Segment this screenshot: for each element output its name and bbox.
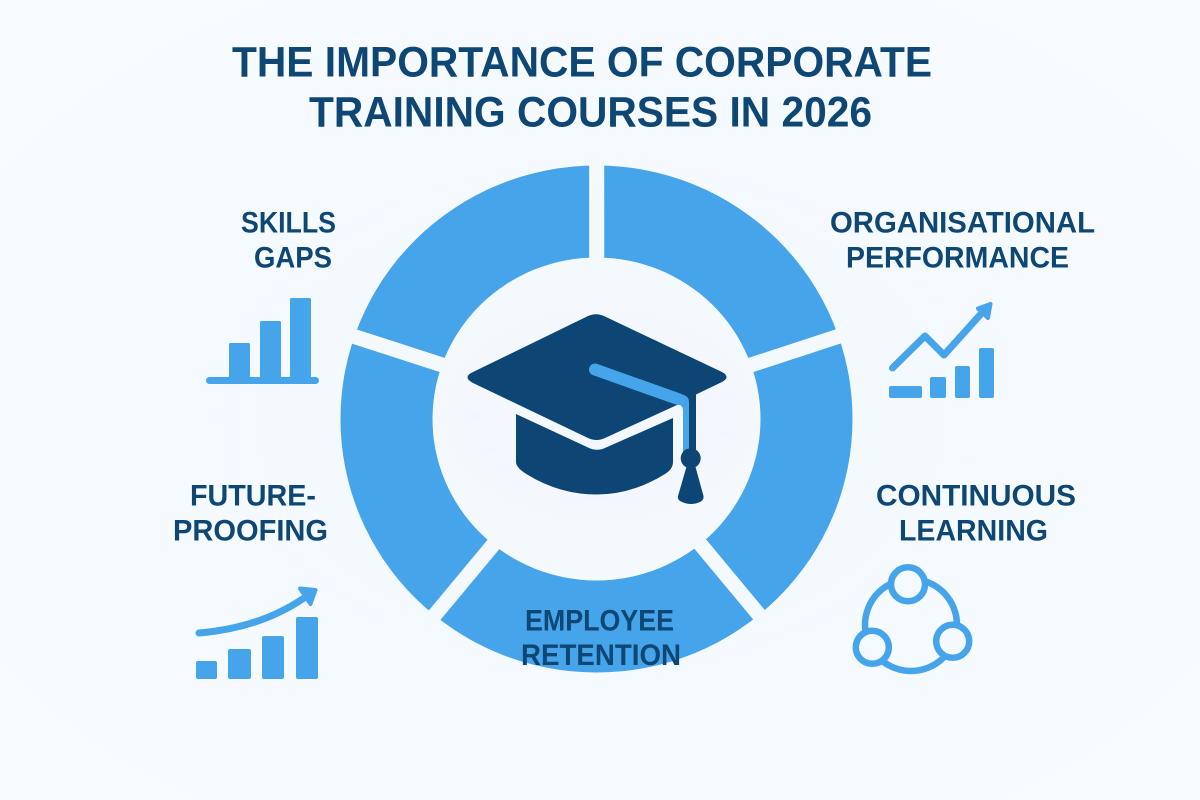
label: organisational performance: PERFORMANCE: [846, 242, 1069, 274]
cap strap: [595, 370, 689, 453]
donut chart: five segments: [340, 165, 852, 672]
icon: bar chart: [206, 298, 319, 384]
label: future-proofing: PROOFING: [173, 514, 328, 548]
icon: curved arrow with bars: [196, 588, 318, 679]
label: future-proofing: FUTURE-: [190, 480, 316, 512]
label: skills gaps: [241, 206, 336, 274]
label: skills gaps: SKILLS: [241, 206, 336, 240]
tassel cord: [689, 393, 696, 453]
title: TRAINING COURSES IN 2026: [309, 89, 872, 137]
label: continuous learning: LEARNING: [899, 514, 1048, 548]
title: THE IMPORTANCE OF CORPORATE: [232, 39, 932, 87]
label: future-proofing: [173, 480, 328, 548]
icon: cycle of three nodes: [856, 567, 969, 671]
cap board: [468, 314, 726, 440]
icon: rising zigzag arrow with bars: [889, 304, 994, 398]
label: employee retention: RETENTION: [521, 639, 681, 672]
icon: graduation cap: [468, 314, 726, 504]
label: skills gaps: GAPS: [254, 242, 332, 274]
title: [232, 39, 932, 137]
label: employee retention: EMPLOYEE: [525, 604, 674, 638]
label: continuous learning: CONTINUOUS: [876, 480, 1076, 512]
label: organisational performance: ORGANISATIONAL: [830, 206, 1095, 240]
tassel: [678, 465, 704, 504]
cap base: [516, 414, 673, 494]
label: continuous learning: [876, 480, 1076, 548]
label: organisational performance: [830, 206, 1095, 274]
label: employee retention: [521, 604, 681, 672]
tassel knot: [681, 448, 701, 468]
